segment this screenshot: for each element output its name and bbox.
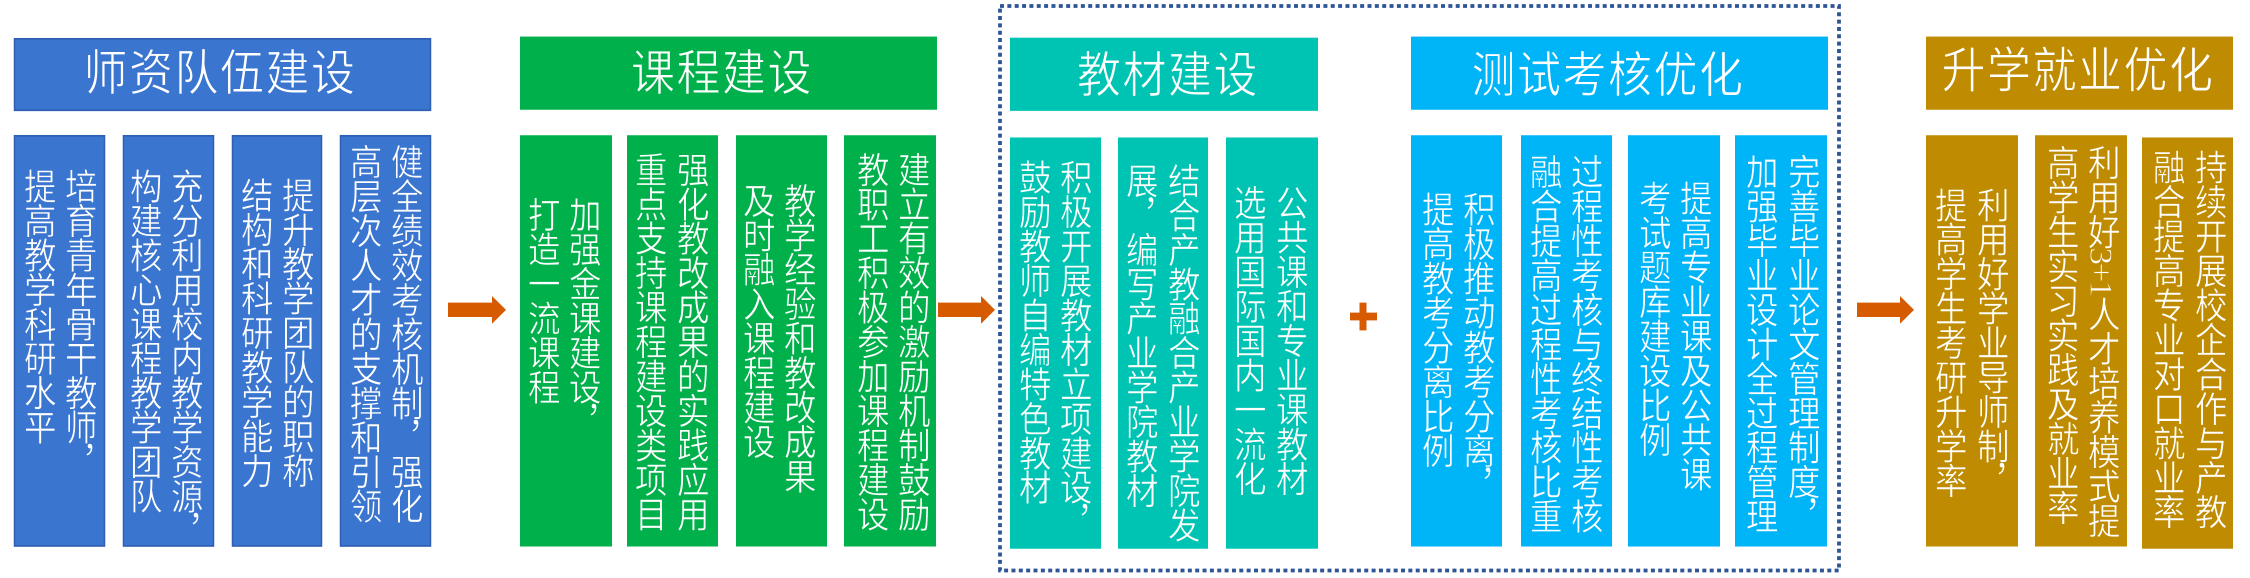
column: 金课建设: 打造一流课程: [523, 197, 561, 404]
heading: 课程建设: [520, 37, 937, 110]
column: 绩效考核机制: [340, 136, 430, 546]
heading: 升学就业优化: 升学就业优化: [1942, 43, 2214, 98]
column: 教考分离: 积极推动教考分离，: [1458, 191, 1495, 501]
heading: 课程建设: 课程建设: [631, 46, 813, 100]
column: 教考分离: [1411, 135, 1502, 547]
column: 教学经验融入课程: 及时融入课程建设: [738, 182, 776, 459]
column: 教学经验融入课程: [736, 135, 827, 547]
column: 教学团队职称结构: 提升教学团队的职称: [277, 177, 315, 488]
arrow: assessment to employment: [1857, 296, 1914, 324]
heading: 测试考核优化: [1411, 37, 1828, 110]
column: 教改成果实践应用: 重点支持课程建设类项目: [630, 151, 668, 531]
column: 选用一流教材: 选用国际国内一流化: [1229, 184, 1266, 496]
column: 选用一流教材: [1226, 137, 1318, 549]
heading: 升学就业优化: [1926, 37, 2233, 110]
column: 校企合作与产教融合: [2142, 137, 2233, 549]
column: 核心课程教学团队: 构建核心课程教学团队: [125, 168, 163, 514]
column: 3+1人才培养模式: [2035, 135, 2127, 547]
column: 教材立项建设: 积极开展教材立项建设，: [1055, 159, 1093, 538]
column: 教学团队职称结构: [232, 136, 322, 546]
column: 校企合作与产教融合: 持续开展校企合作与产教: [2190, 149, 2228, 529]
column: 教材立项建设: 鼓励教师自编特色教材: [1014, 159, 1052, 504]
panel: 升学就业优化: [1926, 37, 2233, 549]
heading: 教材建设: [1010, 38, 1318, 111]
column: 过程性考核: 融合提高过程性考核比重: [1525, 153, 1563, 532]
panel: 教材建设: [1010, 38, 1318, 549]
arrow: curriculum to materials: [938, 296, 995, 324]
column: 绩效考核机制: 健全绩效考核机制，强化: [386, 143, 424, 524]
column: 核心课程教学团队: [124, 136, 214, 547]
column: 毕业论文管理: 完善毕业论文管理制度，: [1783, 153, 1820, 532]
column: 产业学院教材: [1118, 137, 1208, 549]
column: 选用一流教材: 公共课和专业课教材: [1271, 184, 1309, 495]
column: 毕业论文管理: [1735, 135, 1827, 547]
column: 核心课程教学团队: 充分利用校内教学资源，: [166, 168, 204, 547]
column: 校企合作与产教融合: 融合提高专业对口就业率: [2148, 149, 2186, 529]
column: 教学经验融入课程: 教学经验和教改成果: [779, 182, 817, 494]
column: 学业导师制: 提高学生考研升学率: [1930, 187, 1968, 498]
heading: 教材建设: 教材建设: [1077, 48, 1259, 103]
column: 教材立项建设: [1010, 137, 1101, 549]
column: 教考分离: 提高教考分离比例: [1417, 191, 1455, 468]
icon: plus sign: [1350, 303, 1377, 330]
column: 青年骨干教师: 提高教学科研水平: [19, 168, 57, 445]
column: 青年骨干教师: 培育青年骨干教师，: [60, 168, 97, 478]
column: 教改成果实践应用: 强化教改成果的实践应用: [672, 151, 709, 532]
column: 产业学院教材: 结合产教融合产业学院发: [1163, 162, 1200, 543]
panel: 课程建设: [520, 37, 937, 547]
column: 激励机制: 教职工积极参加课程建设: [852, 151, 890, 532]
column: 教改成果实践应用: [627, 135, 718, 547]
heading: 测试考核优化: 测试考核优化: [1472, 48, 1744, 103]
column: 过程性考核: 过程性考核与终结性考核: [1566, 153, 1604, 534]
column: 考试题库建设: [1628, 135, 1720, 547]
column: 激励机制: [844, 135, 936, 547]
column: 毕业论文管理: 加强毕业设计全过程管理: [1741, 153, 1779, 532]
panel: 测试考核优化: [1411, 37, 1828, 547]
heading: 师资队伍建设: [14, 39, 430, 110]
column: 教学团队职称结构: 结构和科研教学能力: [236, 177, 274, 488]
column: 学业导师制: 利用好学业导师制，: [1972, 187, 2010, 497]
column: 3+1人才培养模式: 利用好 3+1 人才培养模式提: [2083, 144, 2121, 538]
column: 激励机制: 建立有效的激励机制鼓励: [893, 151, 931, 532]
column: 产业学院教材: 展，编写产业学院教材: [1121, 162, 1159, 507]
column: 金课建设: 加强金课建设，: [564, 197, 602, 438]
column: 金课建设: [520, 135, 612, 547]
heading: 师资队伍建设: 师资队伍建设: [84, 46, 356, 100]
column: 3+1人才培养模式: 高学生实习实践及就业率: [2042, 144, 2079, 525]
panel: 师资队伍建设: [14, 39, 430, 547]
column: 绩效考核机制: 高层次人才的支撑和引领: [345, 143, 383, 524]
arrow: first to curriculum: [448, 296, 506, 324]
column: 考试题库建设: 考试题库建设比例: [1634, 180, 1671, 457]
column: 青年骨干教师: [14, 136, 104, 546]
column: 学业导师制: [1926, 135, 2018, 547]
column: 考试题库建设: 提高专业课及公共课: [1675, 180, 1713, 492]
column: 过程性考核: [1521, 135, 1612, 547]
